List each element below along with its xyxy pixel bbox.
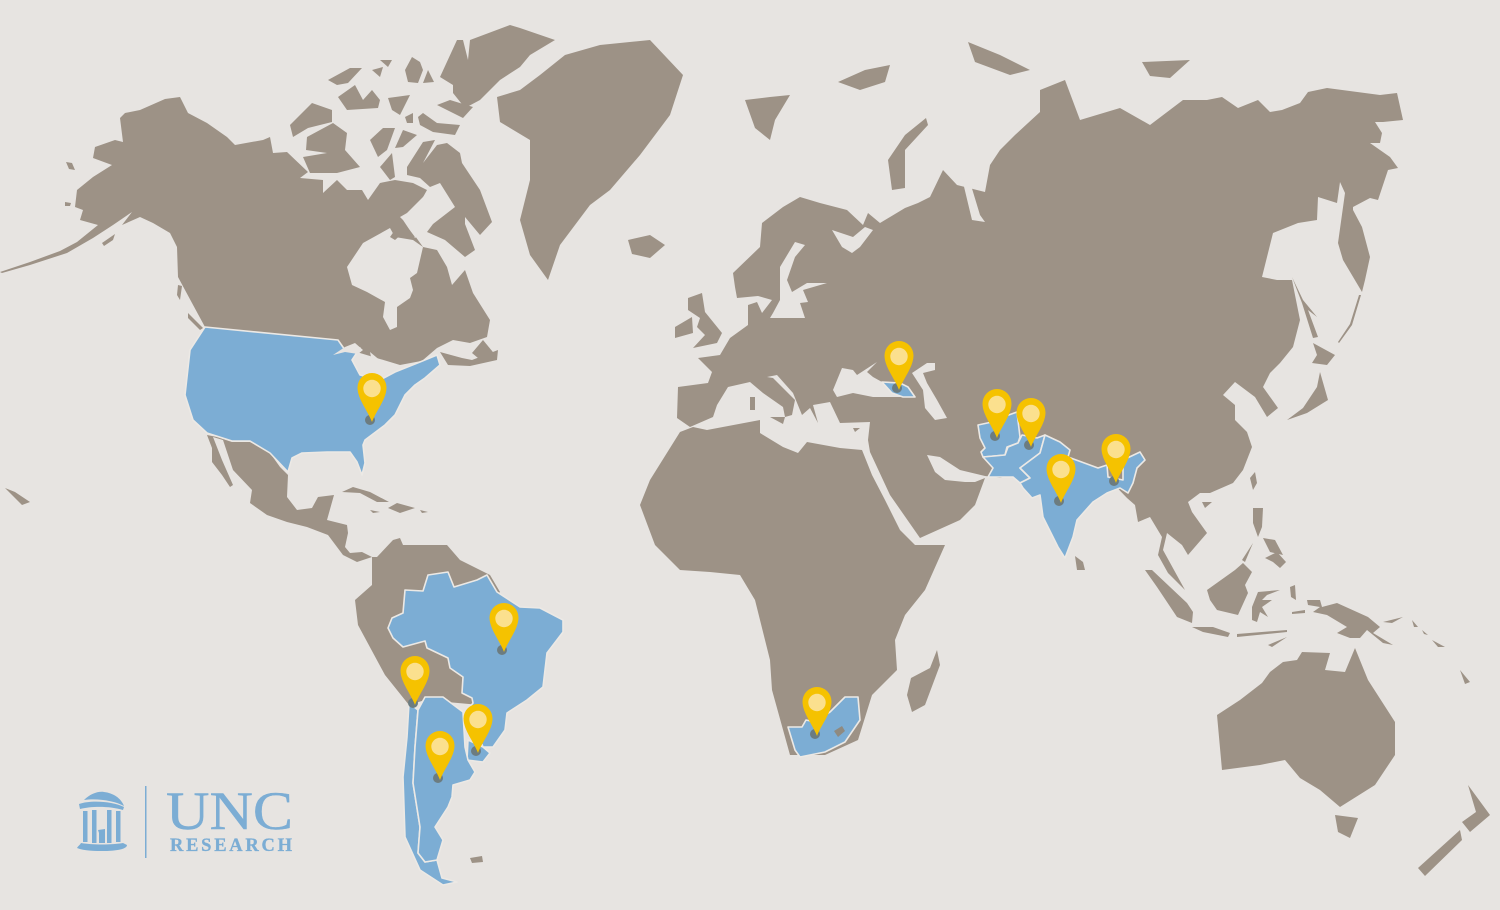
Caribbean islands <box>342 487 428 513</box>
Kuril Islands <box>1338 295 1361 343</box>
water bodies <box>347 170 985 420</box>
Japan <box>1287 343 1335 420</box>
British Isles <box>675 293 722 348</box>
Gulf of Ob <box>960 170 985 222</box>
wordmark UNC: UNC <box>166 781 293 841</box>
White Sea <box>832 227 873 253</box>
Foxe Basin <box>400 183 455 238</box>
Iran region <box>978 412 1020 457</box>
Sakhalin <box>1292 277 1318 338</box>
Iceland <box>628 235 665 258</box>
Novaya Zemlya <box>888 118 928 190</box>
pin: Brazil <box>490 603 518 655</box>
Severnaya Zemlya <box>968 42 1030 75</box>
Hainan <box>1202 502 1212 508</box>
Australia <box>1217 648 1395 807</box>
South America northern and western land <box>355 538 500 705</box>
Mediterranean islands <box>750 397 860 432</box>
North America: Alaska and Canada <box>0 97 490 365</box>
icon: Old Well <box>77 792 127 851</box>
Malay islands chain <box>1192 627 1287 647</box>
pin: India <box>1046 454 1076 506</box>
pin: Central Asia west <box>982 389 1012 441</box>
Franz Josef Land <box>838 65 890 90</box>
location pins <box>358 341 1130 783</box>
Great Lakes <box>333 343 382 372</box>
Mexico and Central America <box>207 435 372 562</box>
continents <box>0 40 1403 807</box>
Tasmania <box>1335 815 1358 838</box>
Philippines <box>1242 508 1286 568</box>
pin: Argentina <box>426 731 454 783</box>
Sulawesi <box>1252 590 1280 622</box>
United States <box>185 327 440 475</box>
Lesotho <box>834 726 845 737</box>
divider line <box>145 786 146 858</box>
wordmark RESEARCH: RESEARCH <box>170 836 293 856</box>
Hudson Bay <box>347 228 423 330</box>
New Siberian Islands <box>1142 60 1190 78</box>
Uruguay <box>467 740 490 762</box>
pin: South Africa <box>802 687 832 739</box>
pin: Chile <box>400 656 430 708</box>
Georgia <box>882 382 915 397</box>
Canadian arctic islands <box>290 25 555 366</box>
Greenland <box>497 40 683 280</box>
pin: Black Sea <box>884 341 914 393</box>
Black Sea <box>833 362 903 397</box>
New Britain and Solomon Islands <box>5 488 1470 684</box>
highlighted countries <box>185 327 1145 885</box>
Africa <box>640 420 945 755</box>
Chile <box>403 703 457 885</box>
Argentina <box>413 697 475 862</box>
India <box>1020 435 1145 558</box>
pin: Central Asia east <box>1016 398 1046 450</box>
Eurasia <box>677 80 1403 590</box>
Moluccas <box>1290 585 1305 614</box>
Brazil <box>388 572 563 747</box>
New Guinea <box>1307 600 1393 645</box>
Svalbard <box>745 95 790 140</box>
Taiwan <box>1250 472 1257 490</box>
Alaska and British Columbia islands <box>65 162 203 330</box>
Baltic Sea <box>770 242 827 318</box>
New Zealand <box>1418 785 1490 876</box>
logo: UNC Research <box>77 781 293 858</box>
pin: Bangladesh <box>1102 434 1130 486</box>
Pakistan region <box>983 435 1045 483</box>
pin: Uruguay <box>464 704 492 756</box>
Madagascar <box>907 650 940 712</box>
South Africa <box>788 697 860 757</box>
Gulf of St Lawrence <box>437 338 487 368</box>
Sri Lanka <box>1075 556 1085 570</box>
Caspian Sea <box>912 363 947 420</box>
pin: United States <box>358 373 386 425</box>
Borneo <box>1207 563 1252 615</box>
Sumatra <box>1145 570 1193 623</box>
Falkland Islands <box>470 856 483 863</box>
